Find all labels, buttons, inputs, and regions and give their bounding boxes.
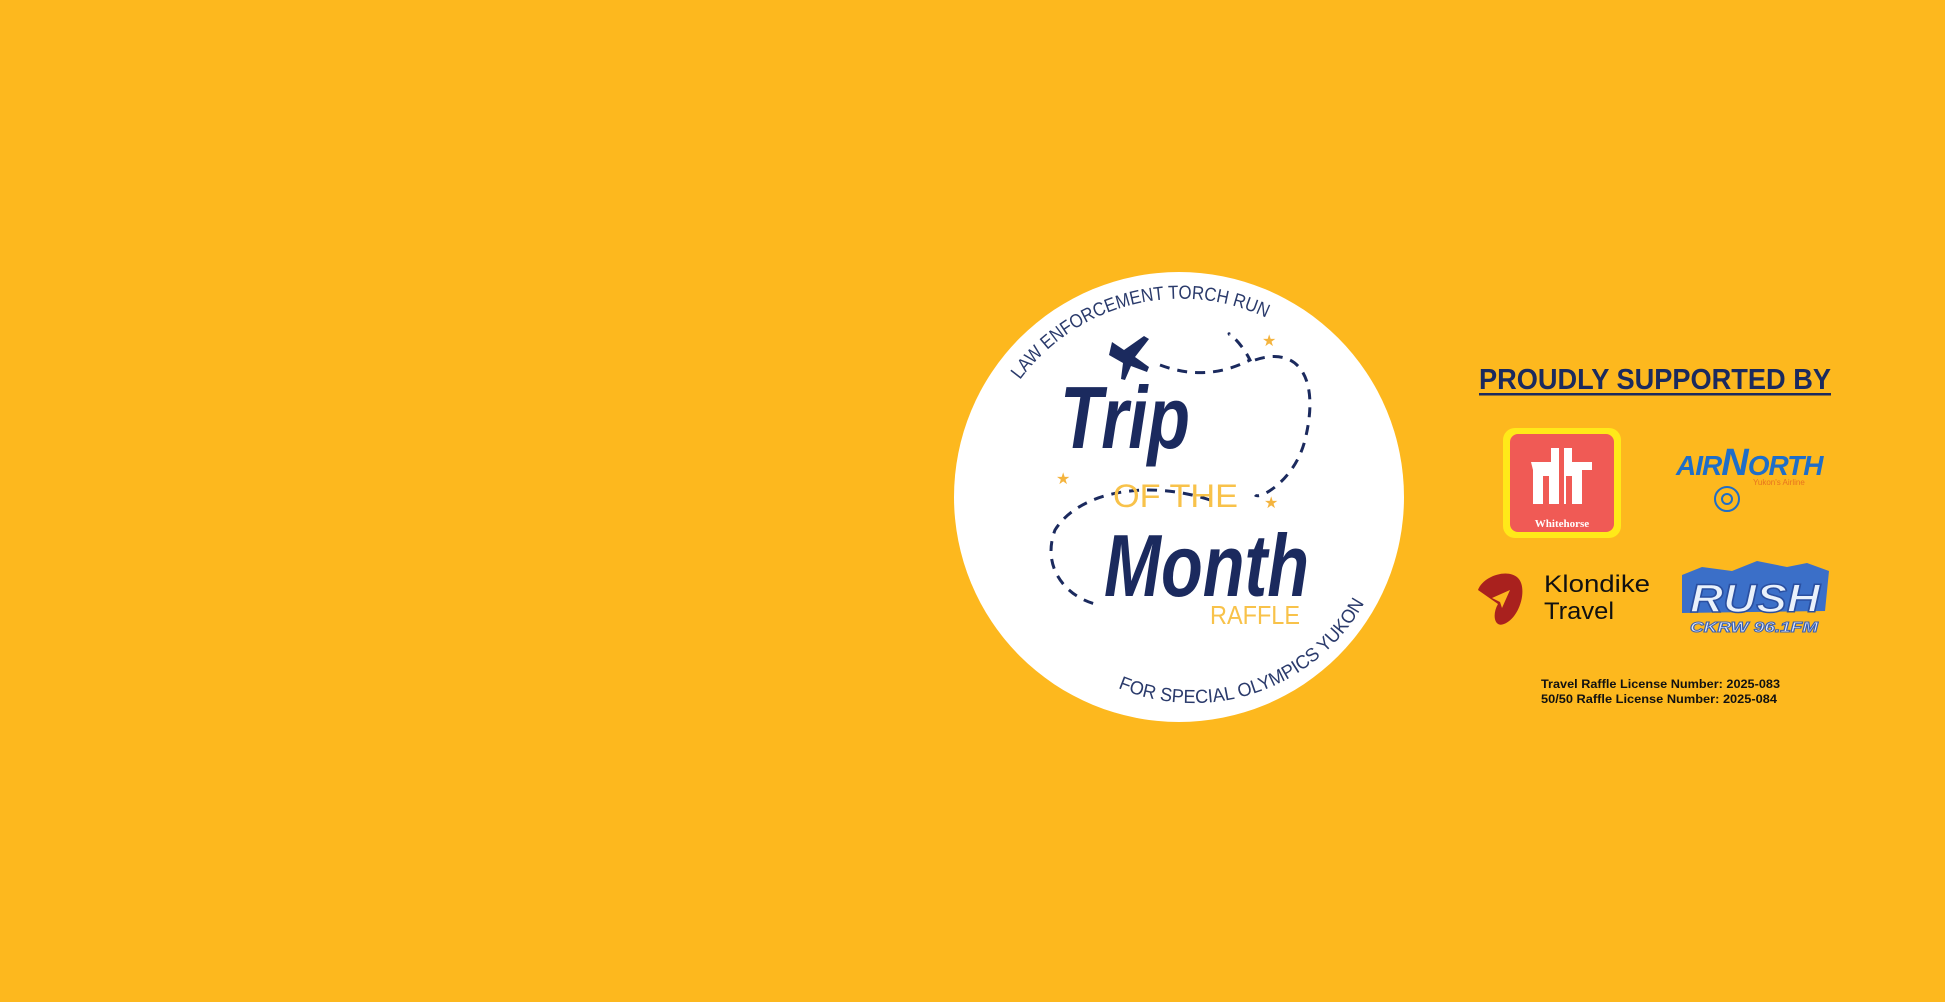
logo: trip of the month circle: ★ (1264, 495, 1278, 512)
dashed flight path (1051, 334, 1310, 605)
arc text bottom: FOR SPECIAL OLYMPICS YUKON (1119, 598, 1364, 704)
license text (1541, 677, 1780, 706)
icon: plane (1109, 336, 1149, 380)
license text: 50/50 Raffle License Number: 2025-084 (1541, 692, 1777, 706)
logo: trip of the month circle (954, 272, 1404, 722)
logo: the rush: RUSH (1690, 577, 1821, 621)
logo: klondike travel (1478, 571, 1650, 625)
logo: trip of the month circle: ★ (1056, 471, 1070, 488)
heading: proudly supported by: PROUDLY SUPPORTED BY (1479, 364, 1831, 396)
logo: air north (1675, 442, 1824, 511)
stars: ★ (1262, 333, 1276, 350)
logo: home hardware (1503, 428, 1621, 538)
logo: trip of the month circle: RAFFLE (1210, 600, 1300, 630)
logo: trip of the month circle: OF THE (1113, 478, 1238, 514)
logo: air north: Yukon's Airline (1753, 478, 1805, 487)
logo: klondike travel: Travel (1544, 598, 1614, 625)
logo: trip of the month circle: Month (1104, 516, 1309, 615)
logo: home hardware: Whitehorse (1535, 518, 1589, 530)
logo: air north: AIRNORTH (1675, 442, 1824, 484)
logo: the rush: CKRW 96.1FM (1690, 619, 1819, 636)
logo: the rush (1682, 561, 1829, 636)
arc text top: LAW ENFORCEMENT TORCH RUN (1010, 286, 1270, 379)
title text: Trip (1060, 368, 1190, 467)
logo: klondike travel: Klondike (1544, 571, 1650, 598)
license text: Travel Raffle License Number: 2025-083 (1541, 677, 1780, 691)
